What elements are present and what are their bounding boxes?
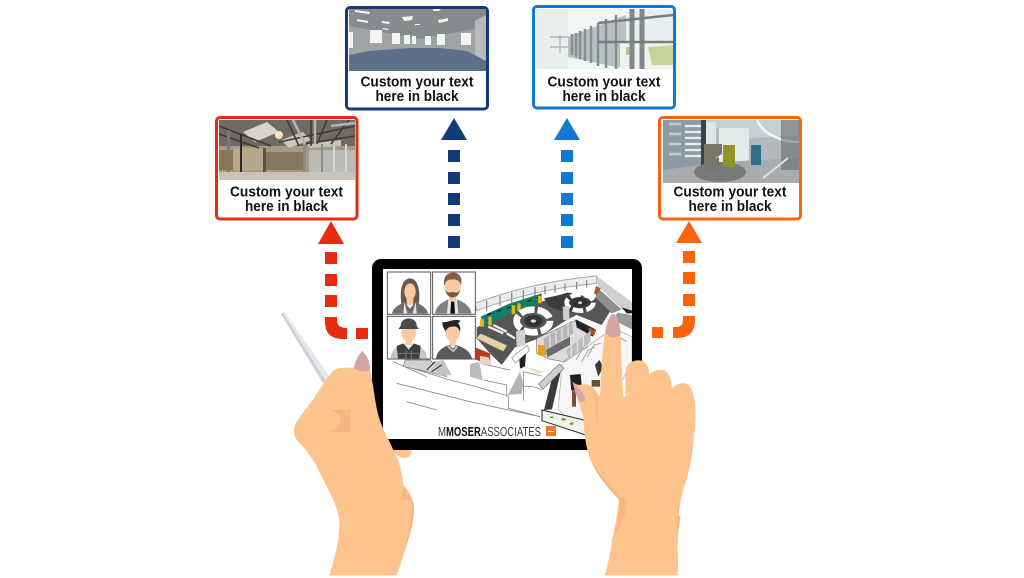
card: empty room (navy): Custom your text bbox=[360, 74, 474, 90]
card: empty room (navy): here in black bbox=[376, 88, 459, 105]
card: construction site (red) bbox=[216, 118, 357, 219]
participant: woman bbox=[387, 272, 431, 314]
card: glass corridor (blue): here in black bbox=[562, 88, 646, 105]
card: glass corridor (blue): Custom your text bbox=[548, 74, 660, 90]
plan: small desks and benches bbox=[488, 325, 515, 338]
plan: dark floor bbox=[477, 293, 610, 365]
arrow: red dashed elbow bbox=[318, 221, 368, 339]
card: construction site (red): Custom your text bbox=[230, 184, 343, 200]
plan: right wing wall bbox=[597, 276, 633, 311]
card: empty room (navy) bbox=[346, 8, 488, 109]
plan: left rooms bbox=[393, 362, 542, 417]
right hand bbox=[573, 314, 696, 575]
photo: construction site bbox=[219, 120, 355, 180]
card: glass corridor (blue) bbox=[534, 6, 674, 108]
thumbnail bbox=[354, 351, 370, 371]
tablet bbox=[372, 259, 642, 450]
card: finished office (orange) bbox=[660, 118, 800, 219]
plan: lounge bbox=[558, 328, 632, 433]
arrow: blue dashed up bbox=[554, 118, 580, 248]
photo: finished office bbox=[663, 120, 799, 183]
stylus bbox=[281, 312, 333, 388]
plan: partitions bbox=[537, 320, 594, 362]
index fingernail bbox=[606, 314, 621, 337]
floor plan bbox=[393, 276, 632, 436]
card: construction site (red): here in black bbox=[245, 198, 329, 215]
finger under tablet bbox=[393, 450, 411, 458]
plan: curved window wall bbox=[475, 276, 597, 311]
participant: bearded man bbox=[433, 272, 475, 314]
photo: glass corridor bbox=[536, 9, 673, 69]
participant: site worker bbox=[387, 316, 431, 359]
thumb fingernail bbox=[573, 382, 585, 402]
logo: MMOSERASSOCIATES bbox=[438, 425, 541, 439]
video call grid bbox=[387, 272, 475, 359]
arrow: navy dashed up bbox=[441, 118, 467, 248]
photo: empty room bbox=[349, 9, 486, 71]
plan: diagonal wall bbox=[512, 345, 529, 363]
plan: black desk bbox=[570, 374, 582, 391]
card: finished office (orange): Custom your text bbox=[674, 184, 786, 200]
arrow: orange dashed elbow bbox=[652, 221, 702, 338]
plan: green workstations bbox=[481, 293, 542, 327]
card: finished office (orange): here in black bbox=[688, 198, 772, 215]
left hand bbox=[294, 351, 414, 575]
participant: man with dark hair bbox=[433, 316, 475, 359]
plan: meeting tables bbox=[517, 295, 593, 332]
plan: dark corridor bbox=[544, 372, 561, 410]
